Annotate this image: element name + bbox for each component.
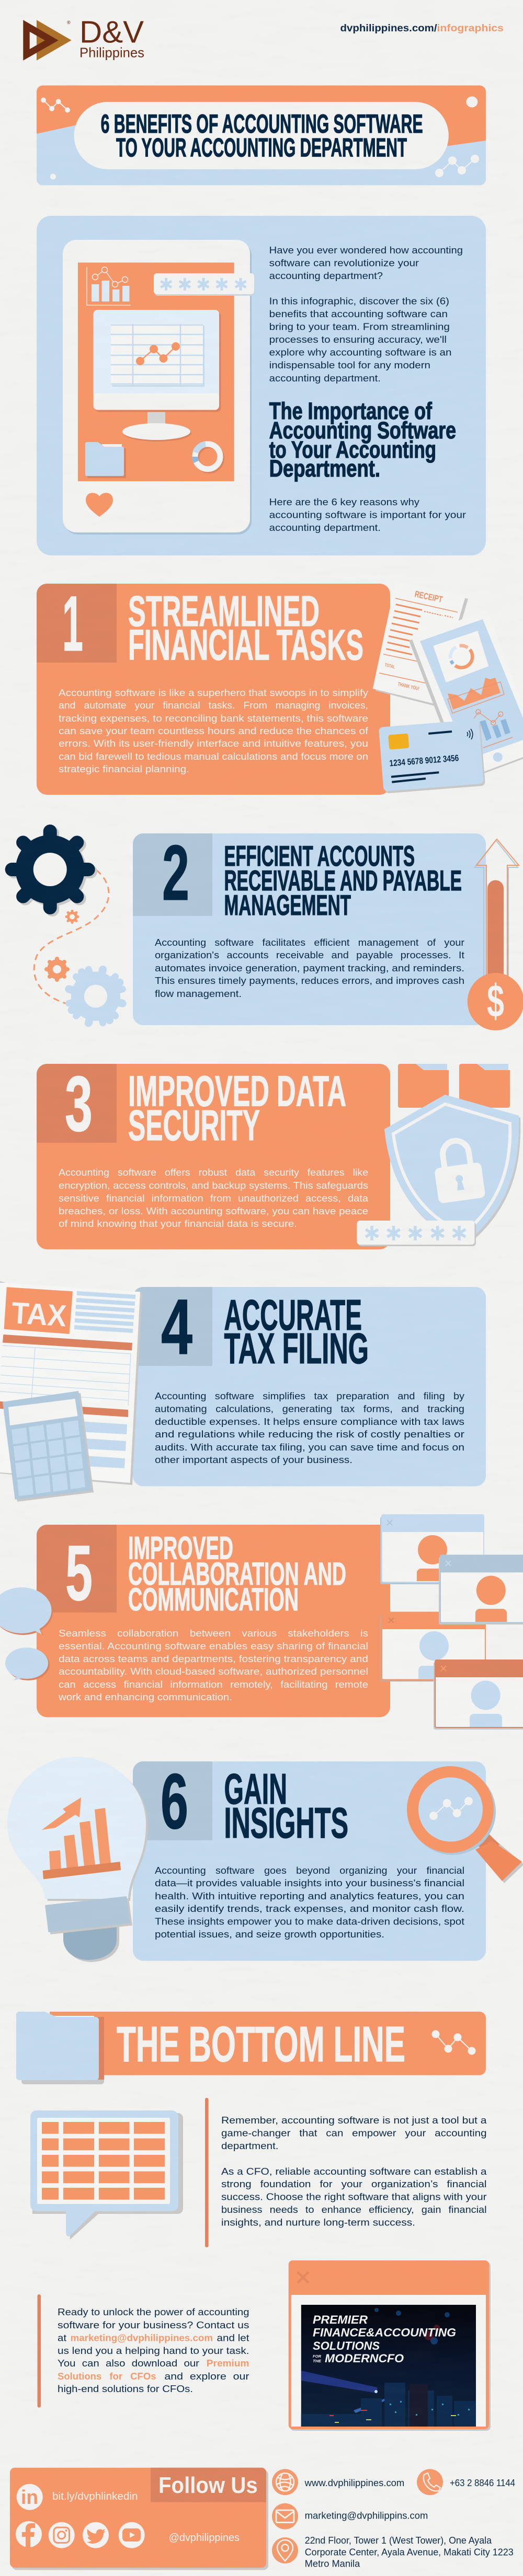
text: conclusion: strong foundation for your organization’s financial <box>221 2178 486 2189</box>
body text: This ensures timely payments, reduces errors, and improves cash <box>155 975 464 986</box>
illustration: receipt: RECEIPT <box>414 589 444 605</box>
text: call to action: high-end solutions for CFOs. <box>58 2383 193 2394</box>
body text <box>155 1865 464 1940</box>
icon: password box <box>357 1221 476 1246</box>
illustration: shield and lock <box>357 1095 520 1246</box>
banner: the bottom line <box>16 2012 486 2084</box>
text: key reasons: accounting department. <box>269 522 381 533</box>
website url: dvphilippines.com/ <box>340 22 437 34</box>
body text: errors. With its user-friendly interface and intuitive features, you <box>59 738 368 749</box>
body text: breaches, or loss. With accounting software, you can have peace <box>59 1205 368 1216</box>
logo: Philippines <box>79 44 144 60</box>
window 2 <box>439 1555 523 1624</box>
bulb base <box>45 1896 132 1962</box>
icon: large navy gear <box>12 831 90 910</box>
heading: importance <box>269 398 456 482</box>
heading <box>224 1765 348 1847</box>
body text: potential issues, and seize growth opportunities. <box>155 1929 384 1940</box>
body text: sensitive financial information from unauthorized access, data <box>59 1192 369 1204</box>
icon: desktop monitor <box>94 310 221 442</box>
number tab <box>133 829 212 916</box>
icon: linkedin: in <box>21 2487 38 2509</box>
logo: ® <box>67 20 71 25</box>
icon: speech bubbles <box>0 1587 53 1680</box>
number tab <box>37 1060 117 1147</box>
icon: network dots right <box>435 155 479 177</box>
text: intro: benefits that accounting software can <box>269 308 448 319</box>
title text <box>101 109 423 163</box>
number tab <box>133 1757 212 1845</box>
handle: @dvphilippines <box>169 2532 240 2544</box>
icon: instagram <box>49 2522 75 2548</box>
body text: easily identify trends, track expenses, and monitor cash flow. <box>155 1903 464 1914</box>
heading: importance: The Importance of <box>269 398 433 424</box>
text: intro: Have you ever wondered how accounting <box>269 245 463 256</box>
illustration: arrow and dollar coin: $ <box>487 975 504 1027</box>
heading: COMMUNICATION <box>128 1582 299 1617</box>
follow us tab: Follow Us <box>158 2473 258 2498</box>
body text <box>58 1628 368 1702</box>
contact: phone <box>417 2469 515 2495</box>
text: intro: accounting department? <box>269 270 383 281</box>
body text <box>155 1390 465 1465</box>
text: key reasons: accounting software is important for your <box>269 509 466 520</box>
text: intro: accounting department. <box>269 373 381 384</box>
promo text: THE <box>313 2360 321 2363</box>
body text: Accounting software offers robust data security features like <box>59 1167 368 1178</box>
heading <box>128 587 363 669</box>
logo: D&V <box>79 15 144 50</box>
contact: email <box>272 2503 428 2529</box>
heading: STREAMLINED <box>128 587 320 635</box>
body text: health. With intuitive reporting and analytics features, you can <box>155 1890 464 1901</box>
body text: accountability. With cloud-based software, authorized personnel <box>59 1666 368 1677</box>
window 4 <box>434 1660 523 1730</box>
illustration: phone <box>409 610 523 781</box>
number tab: 4 <box>161 1283 192 1371</box>
illustration: folders <box>398 1064 510 1108</box>
body text: data—it provides valuable insights into your business's financial <box>155 1877 464 1888</box>
heading <box>224 840 462 921</box>
text: call to action: and let <box>217 2333 249 2343</box>
illustration: arrow and dollar coin <box>468 839 523 1030</box>
follow us tab <box>151 2468 266 2502</box>
illustration: tablet <box>63 240 255 535</box>
body text: and automate your financial tasks. From managing invoices, <box>59 700 368 711</box>
contact: address: 22nd Floor, Tower 1 (West Tower), One Ayala <box>305 2535 492 2546</box>
body text: flow management. <box>155 988 242 999</box>
body text: essential. Accounting software enables easy sharing of financial <box>59 1641 368 1651</box>
body text: Accounting software facilitates efficient management of your <box>155 937 464 948</box>
title banner <box>37 86 486 185</box>
number tab: 3 <box>65 1060 93 1147</box>
text: call to action <box>58 2306 249 2394</box>
illustration: receipt <box>373 581 468 706</box>
body text: work and enhancing communication. <box>58 1691 232 1702</box>
illustration: video call windows <box>380 1515 523 1730</box>
heading: MANAGEMENT <box>224 889 351 921</box>
window: premium solutions for CFOs <box>289 2260 491 2431</box>
heading: importance: Accounting Software <box>269 417 456 444</box>
body text: strategic financial planning. <box>59 763 189 774</box>
contact: address: Metro Manila <box>305 2559 360 2569</box>
heading: ACCURATE <box>224 1291 362 1339</box>
body text: data across teams and departments, fostering transparency and <box>59 1653 368 1664</box>
icon: network dots left <box>41 98 70 112</box>
body text: Accounting software simplifies tax preparation and filing by <box>155 1390 465 1401</box>
panel: benefit 3 <box>37 1060 390 1249</box>
window 1 <box>380 1515 484 1584</box>
promo text: FOR <box>313 2355 321 2359</box>
text: intro <box>269 245 463 384</box>
illustration: gears with dashed path <box>12 831 130 1030</box>
icon: small orange gear <box>66 911 78 923</box>
body text: audits. With accurate tax filing, you can save time and focus on <box>155 1442 464 1453</box>
number tab: 2 <box>162 829 189 916</box>
illustration: receipt: THANK YOU! <box>397 681 420 692</box>
icon: calculator <box>3 1391 94 1502</box>
body text: Seamless collaboration between various stakeholders is <box>59 1628 368 1639</box>
body text <box>155 937 464 999</box>
text: call to action: You can also download our <box>58 2358 199 2369</box>
tax label: TAX <box>10 1296 67 1333</box>
heading <box>128 1067 346 1150</box>
number tab: 1 <box>62 579 83 667</box>
body text <box>59 1167 369 1229</box>
heading: importance: to Your Accounting <box>269 436 436 463</box>
heading: IMPROVED <box>128 1530 233 1565</box>
panel: benefit 6 <box>133 1757 486 1961</box>
body text: deductible expenses. It helps ensure compliance with tax laws <box>155 1416 464 1427</box>
heading: TAX FILING <box>224 1324 369 1373</box>
heading <box>224 1291 369 1373</box>
text: call to action: at <box>58 2333 66 2343</box>
text: conclusion: insights, and nurture long-term success. <box>221 2217 415 2228</box>
promo text <box>313 2313 456 2365</box>
text: call to action: marketing@dvphilippines.com <box>71 2333 213 2343</box>
text: call to action: Premium <box>207 2358 249 2369</box>
promo text: PREMIER <box>313 2313 368 2326</box>
text: intro: software can revolutionize your <box>269 257 419 269</box>
icon: network dots <box>432 2030 475 2055</box>
number tab: 6 <box>161 1757 188 1845</box>
promo text: SOLUTIONS <box>313 2339 380 2352</box>
text: conclusion: As a CFO, reliable accounting software can establish a <box>221 2166 487 2177</box>
text: call to action: us lend you a helping hand to your task. <box>58 2345 249 2356</box>
heading: GAIN <box>224 1765 287 1813</box>
promo image <box>301 2305 476 2427</box>
icon: password box <box>154 273 255 296</box>
text: call to action: software for your business? Contact us <box>58 2319 249 2330</box>
icon: folder <box>85 442 126 478</box>
text: intro: indispensable tool for any modern <box>269 359 430 370</box>
text: call to action: Solutions for CFOs <box>58 2371 156 2382</box>
number tab <box>133 1283 212 1371</box>
illustration: receipt: TOTAL <box>384 662 396 670</box>
panel: follow us <box>10 2468 268 2570</box>
icon: large blue gear <box>62 962 130 1030</box>
number tab <box>37 1525 117 1617</box>
window 3 <box>380 1612 485 1681</box>
body text: Accounting software is like a superhero that swoops in to simplify <box>59 687 369 698</box>
contact: address: Corporate Center, Ayala Avenue, Makati City 1223 <box>305 2547 514 2558</box>
text: intro: bring to your team. From streamlining <box>269 321 450 332</box>
body text: tracking expenses, to reconciling bank statements, this software <box>59 713 368 724</box>
body text: organization's accounts receivable and payable processes. It <box>155 949 464 960</box>
promo text: MODERNCFO <box>325 2352 404 2365</box>
text: call to action: Ready to unlock the power of accounting <box>58 2306 249 2317</box>
body text: and regulations while reducing the risk of costly penalties or <box>155 1429 464 1440</box>
icon: heart <box>86 493 113 517</box>
body text: can access financial information remotely, facilitating remote <box>59 1679 368 1690</box>
text: intro: In this infographic, discover the six (6) <box>269 296 449 306</box>
number tab <box>37 579 117 667</box>
body text: automating calculations, generating tax forms, and tracking <box>155 1403 464 1414</box>
panel: benefit 5 <box>37 1525 390 1717</box>
text: conclusion <box>221 2115 487 2228</box>
body text: other important aspects of your business. <box>155 1454 353 1465</box>
promo text: FINANCE&ACCOUNTING <box>313 2326 456 2339</box>
body text: of mind knowing that your financial data is secure. <box>59 1218 297 1229</box>
illustration: magnifying glass <box>407 1766 523 1883</box>
website url <box>340 22 504 34</box>
text: conclusion: business needs to enhance efficiency, gain financial <box>221 2204 486 2215</box>
icon: facebook <box>16 2521 42 2547</box>
text: conclusion: game-changer that can empower your accounting <box>221 2128 486 2138</box>
icon: youtube <box>119 2522 145 2548</box>
body text: automates invoice generation, payment tracking, and reminders. <box>155 962 464 973</box>
panel: benefit 4 <box>133 1283 486 1486</box>
logo <box>23 15 144 61</box>
heading: IMPROVED DATA <box>128 1067 346 1116</box>
heading: INSIGHTS <box>224 1798 348 1847</box>
illustration: credit card <box>379 720 485 794</box>
body text: encryption, access controls, and backup systems. This safeguards <box>59 1180 368 1191</box>
icon: donut chart <box>195 444 222 471</box>
contact: email: marketing@dvphilippins.com <box>305 2511 428 2521</box>
panel: introduction <box>37 216 486 555</box>
body text: can bid farewell to tedious manual calculations and focus more on <box>59 751 368 762</box>
body text: These insights empower you to make data-driven decisions, spot <box>155 1916 464 1927</box>
contact: website <box>272 2469 404 2495</box>
number tab: 5 <box>65 1529 93 1617</box>
body text <box>59 687 369 774</box>
text: conclusion: success. Choose the right software that aligns with your <box>221 2191 486 2202</box>
icon: medium orange gear <box>47 959 67 980</box>
text: conclusion: department. <box>221 2140 278 2151</box>
text: key reasons: Here are the 6 key reasons why <box>269 496 420 507</box>
text: call to action: and explore our <box>164 2371 249 2382</box>
heading <box>128 1530 346 1617</box>
heading: COLLABORATION AND <box>128 1556 346 1592</box>
icon: linkedin <box>17 2484 43 2510</box>
text: intro: processes to ensuring accuracy, we'll <box>269 334 447 345</box>
text: key reasons <box>269 496 466 533</box>
heading: SECURITY <box>128 1101 260 1150</box>
text: conclusion: Remember, accounting software is not just a tool but a <box>221 2115 487 2126</box>
heading: FINANCIAL TASKS <box>128 621 363 669</box>
panel: benefit 1 <box>37 579 523 795</box>
illustration: chat bubble with table <box>30 2110 183 2240</box>
website url: infographics <box>437 22 504 34</box>
growth bars <box>42 1797 111 1872</box>
contact: website: www.dvphilippines.com <box>304 2478 404 2488</box>
linkedin link: bit.ly/dvphlinkedin <box>52 2491 138 2502</box>
icon: twitter <box>83 2522 109 2548</box>
text: intro: explore why accounting software is an <box>269 347 452 357</box>
panel: benefit 2 <box>133 829 486 1025</box>
heading: importance: Department. <box>269 455 380 482</box>
icon: padlock <box>431 1138 486 1204</box>
illustration: tax form <box>0 1281 142 1502</box>
body text: can save your team countless hours and reduce the chances of <box>59 725 369 736</box>
illustration: light bulb with growth chart <box>7 1757 148 1962</box>
illustration: credit card: 1234 5678 9012 3456 <box>389 753 459 768</box>
icon: folder <box>16 2012 104 2084</box>
icon: bar chart <box>87 267 131 305</box>
body text: Accounting software goes beyond organizing your financial <box>155 1865 464 1876</box>
contact: address <box>272 2535 514 2569</box>
contact: phone: +63 2 8846 1144 <box>450 2478 515 2488</box>
